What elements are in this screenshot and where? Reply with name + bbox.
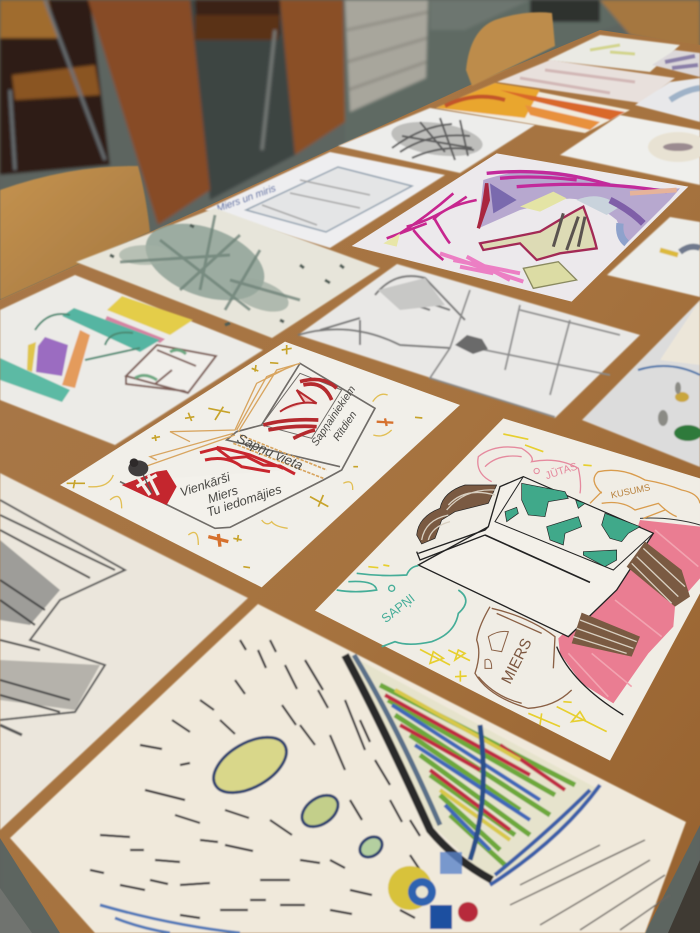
drawing: purple and pink abstract sheet — [352, 153, 688, 302]
far chair — [195, 15, 280, 40]
cloud: JŪTAS: JŪTAS — [544, 461, 579, 482]
claw shape — [480, 207, 597, 260]
drawing: open book sheet with folk ornaments: Miers — [206, 483, 240, 506]
cloud: MIERS — [475, 607, 572, 708]
drawing: book sketch sheet — [205, 152, 445, 248]
drawing: right white sheet with mandala — [560, 115, 700, 185]
drawing: grey feather sketch — [338, 108, 535, 173]
far right wood — [600, 0, 700, 50]
handwritten label: Miers un miris — [215, 183, 278, 215]
drawing: pencil building sketch — [298, 264, 640, 418]
cloud: KUSUMS — [590, 470, 700, 518]
crayon outline — [345, 655, 492, 880]
cloud: MIERS: MIERS — [498, 636, 536, 687]
chair behind, left — [0, 0, 105, 170]
cloud: KUSUMS: KUSUMS — [610, 482, 651, 500]
left page text: Vienkārši — [178, 470, 233, 500]
brown fringe right — [572, 542, 690, 657]
brown fringe top — [417, 485, 497, 544]
far chair at table — [466, 12, 555, 86]
bird panel — [262, 373, 342, 438]
right page text: Sapņainiekiem — [309, 384, 358, 448]
small figure — [388, 852, 478, 929]
drawing: colourful books sheet — [0, 275, 263, 445]
stacked books — [0, 296, 193, 402]
cloud: SAPŅI: SAPŅI — [379, 591, 417, 626]
pink scarf — [558, 520, 700, 703]
pink branches — [387, 193, 477, 260]
drawing: open book sheet with folk ornaments: Rītdien — [331, 409, 359, 443]
book top and cover — [418, 477, 653, 637]
wooden cabinet right — [280, 0, 345, 155]
purple creature — [478, 171, 680, 243]
wooden cabinet left — [88, 0, 210, 225]
drawing: stones sheet at right — [582, 300, 700, 467]
light openings — [204, 726, 386, 861]
drawing: far small sheets row — [497, 35, 700, 122]
book pages — [140, 363, 300, 468]
cloud: SAPŅI — [337, 566, 466, 647]
small book — [523, 262, 577, 288]
teal clouds — [505, 483, 640, 567]
striped book spines — [350, 655, 600, 880]
cloud: JŪTAS — [478, 447, 581, 493]
drawing: left pencil staircase sheet — [0, 473, 248, 830]
grey drawer unit — [345, 0, 428, 112]
stars and swirls — [67, 345, 422, 568]
drawing: orange abstract sheet — [436, 83, 630, 133]
drawing: open book sheet with folk ornaments — [60, 342, 460, 587]
book outline — [120, 363, 375, 528]
drawing: book with clouds and marker scarf — [315, 418, 700, 761]
near chair — [0, 166, 150, 300]
drawing: crayon tunnel and books sheet — [10, 604, 686, 933]
book title: Sapņu vieta — [235, 431, 305, 473]
drawing: green-grey ink splash sheet — [76, 208, 380, 338]
floor bottom corner — [0, 888, 32, 933]
pink scribble — [440, 253, 523, 282]
red wave band — [200, 447, 295, 474]
drawing: right sheet with small figure — [607, 217, 700, 297]
yellow sparkles — [368, 434, 607, 732]
tunnel ink dashes — [90, 640, 422, 918]
open book — [126, 345, 216, 393]
figure in folk dress — [122, 458, 177, 505]
drawing: open book sheet with folk ornaments: Tu iedomājies — [205, 482, 284, 520]
